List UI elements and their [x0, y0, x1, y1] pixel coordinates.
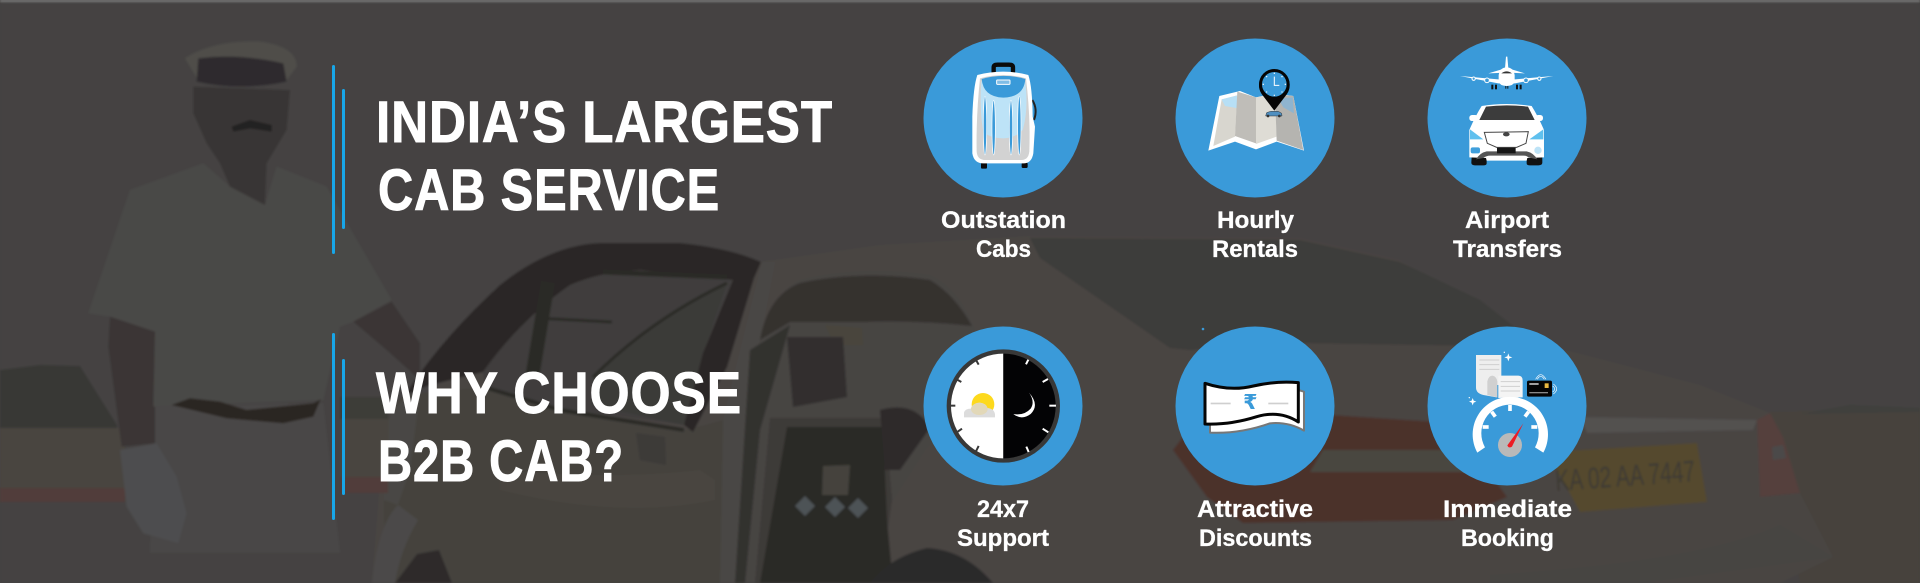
label	[957, 496, 1049, 552]
label	[1197, 496, 1313, 552]
feature: attractive discounts	[1176, 326, 1334, 552]
rear window	[1030, 238, 1540, 350]
dark photo details above overlay	[172, 57, 993, 583]
licence plate	[1547, 443, 1707, 512]
icon: day and night clock	[947, 349, 1060, 463]
icon: suitcase	[972, 65, 1036, 169]
door window	[483, 270, 733, 425]
interior opening	[738, 271, 975, 583]
service: hourly rentals	[1176, 38, 1334, 263]
label	[941, 207, 1066, 263]
icon: rupee banknote	[1205, 382, 1304, 433]
label: Immediate	[1443, 496, 1572, 523]
label: Hourly	[1217, 207, 1295, 234]
label: Discounts	[1199, 525, 1312, 552]
label: Rentals	[1212, 236, 1298, 263]
far right field	[1770, 408, 1920, 583]
icon: map with clock pin	[1208, 69, 1304, 151]
label: Support	[957, 525, 1049, 552]
label: Attractive	[1197, 496, 1313, 523]
label: Transfers	[1453, 236, 1562, 263]
heading: India's largest cab service: CAB SERVICE	[378, 158, 720, 223]
wheels	[870, 548, 993, 583]
car body	[372, 236, 1833, 583]
service: airport transfers	[1428, 38, 1586, 263]
label	[1443, 496, 1572, 552]
heading: India's largest cab service: INDIA’S LARGEST	[376, 90, 833, 155]
icon: plane and car	[1460, 57, 1553, 165]
accent bars: first heading	[332, 65, 345, 254]
small blue dot	[1202, 328, 1204, 330]
door edge	[384, 393, 420, 505]
heading: why choose B2B cab: B2B CAB?	[378, 429, 624, 494]
background photo: chauffeur and car: KA 02 AA 7447	[1554, 455, 1696, 498]
feature: 24x7 support	[924, 326, 1082, 552]
pillar strip	[720, 262, 775, 583]
door panel	[384, 387, 723, 583]
label: Booking	[1461, 525, 1554, 552]
door frame	[405, 243, 761, 395]
label	[1212, 207, 1298, 263]
label: Cabs	[976, 236, 1031, 263]
heading: why choose B2B cab	[376, 361, 742, 494]
feature: immediate booking	[1428, 326, 1586, 552]
heading: why choose B2B cab: WHY CHOOSE	[376, 361, 742, 426]
chauffeur belt, face and cap details	[172, 57, 321, 423]
trunk details	[1580, 417, 1757, 433]
label: Airport	[1465, 207, 1549, 234]
service: outstation cabs	[924, 38, 1082, 263]
heading: India's largest cab service	[376, 90, 833, 223]
tail lamp	[1173, 415, 1507, 523]
label: 24x7	[977, 496, 1029, 523]
accent bars: second heading	[332, 333, 345, 520]
trees and wall	[0, 365, 117, 428]
label: Outstation	[941, 207, 1066, 234]
right lamp	[1757, 413, 1800, 497]
label	[1453, 207, 1562, 263]
driver seat	[787, 337, 847, 407]
icon: rupee banknote: ₹	[1243, 390, 1258, 414]
icon: receipt, card and speedometer	[1469, 352, 1557, 457]
chauffeur body	[88, 42, 420, 553]
